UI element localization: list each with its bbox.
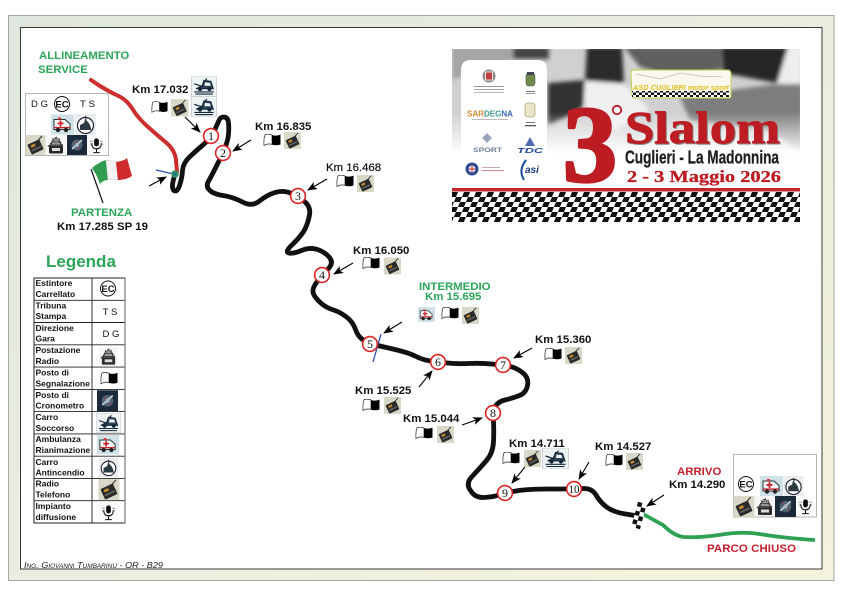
arrow	[233, 140, 251, 151]
marker 4: 4	[319, 268, 325, 282]
row: direzione gara	[36, 323, 119, 344]
italian flag	[91, 158, 132, 203]
route: stage (black)	[172, 117, 638, 516]
marker 5	[363, 337, 377, 351]
marker 9: 9	[502, 486, 508, 500]
row: posto di segnalazione: Posto di	[36, 368, 69, 378]
icon: radio	[565, 347, 582, 364]
label: arrivo	[669, 466, 725, 491]
start line	[156, 170, 178, 177]
callout: Km 14.711	[503, 438, 568, 483]
row: radio telefono: Radio	[36, 478, 59, 488]
marker 7	[496, 358, 510, 372]
row: carro soccorso: Carro	[36, 412, 58, 422]
marker 5: 5	[367, 337, 373, 351]
icon: microphone	[796, 496, 815, 516]
row: tribuna stampa: Tribuna	[36, 300, 66, 310]
icon: radio post	[46, 135, 66, 155]
callout: Km 15.525	[355, 371, 432, 414]
marker 8	[486, 406, 500, 420]
callout: Km 16.468	[308, 162, 381, 192]
callout: Km 16.050	[334, 245, 409, 274]
crest: Provincia di Oristano	[525, 103, 536, 126]
row: carro soccorso	[36, 412, 121, 433]
row: postazione radio: Postazione	[36, 345, 81, 355]
row: estintore	[36, 278, 116, 299]
marker 6	[431, 355, 445, 369]
arrow	[512, 467, 525, 483]
row: radio telefono: Telefono	[36, 490, 70, 500]
icon: timing post	[67, 135, 87, 155]
icon: EC: EC	[739, 480, 753, 490]
arrow	[308, 179, 327, 190]
icon: radio	[524, 450, 541, 467]
logo: ACI Sport: SPORT	[473, 148, 502, 154]
icon: flag	[152, 102, 168, 112]
row: postazione radio	[36, 345, 118, 366]
arrow	[419, 371, 432, 387]
callout: Km 14.527	[579, 441, 651, 479]
icon: ambulance	[760, 476, 783, 496]
row: postazione radio: Radio	[36, 356, 59, 366]
row: ambulanza: Ambulanza	[36, 434, 81, 444]
label: partenza: PARTENZA	[71, 207, 132, 219]
title: 3° Slalom: Slalom	[625, 102, 780, 153]
icon: EC: EC	[55, 100, 69, 110]
start services box: T S	[80, 99, 95, 110]
icon: flag	[606, 454, 622, 466]
marker 4	[315, 268, 329, 282]
logo: TDC	[517, 137, 544, 155]
icon: radio	[384, 258, 401, 274]
row: tribuna stampa: Stampa	[36, 311, 66, 321]
icon: flag	[416, 427, 432, 438]
row: direzione gara: Gara	[36, 334, 55, 344]
logo: ACI Sport Sardegna	[466, 162, 504, 176]
icon: flag	[337, 175, 354, 186]
callout: Km 16.835	[233, 121, 312, 151]
row: estintore: EC	[101, 284, 115, 295]
icon: radio	[357, 175, 374, 192]
start services box: D G	[31, 99, 48, 110]
row: tribuna stampa: T S	[103, 307, 117, 318]
label: partenza	[57, 207, 148, 233]
arrow	[514, 348, 532, 358]
marker 1: 1	[208, 129, 214, 143]
marker 2: 2	[220, 146, 226, 160]
callout: intermedio	[384, 281, 491, 333]
icon: radio post	[755, 496, 775, 516]
label: arrivo: Km 14.290	[669, 479, 725, 491]
marker 3	[291, 189, 305, 203]
logo: ASI	[521, 160, 539, 180]
organiser badge: ASD CUGLIERI motor sport	[632, 85, 730, 92]
row: estintore: Carrellato	[36, 289, 75, 299]
row: posto di cronometro: Posto di	[36, 390, 69, 400]
label: partenza: Km 17.285 SP 19	[57, 221, 148, 233]
sponsors panel	[461, 60, 547, 188]
marker 7: 7	[500, 358, 506, 372]
icon: radio	[384, 397, 401, 414]
crest: Comune di Cuglieri	[526, 72, 535, 94]
arrow	[462, 418, 482, 425]
callout: Km 16.468: Km 16.468	[326, 162, 381, 174]
label: allineamento service	[38, 50, 129, 76]
icon: flag	[503, 452, 520, 464]
start services box	[26, 94, 108, 156]
arrow	[384, 322, 402, 333]
row: direzione gara: D G	[103, 329, 119, 340]
logo: ASI: asi	[525, 165, 539, 176]
arrow	[185, 117, 200, 132]
label: parco chiuso: PARCO CHIUSO	[707, 543, 796, 555]
icon: ambulance	[418, 307, 435, 322]
row: posto di cronometro: Cronometro	[36, 400, 84, 410]
marker 1	[204, 129, 218, 143]
row: radio telefono	[36, 478, 120, 500]
markers	[204, 129, 581, 500]
callout: Km 16.835: Km 16.835	[255, 121, 312, 133]
route: alignment service (red)	[91, 80, 177, 172]
callout: Km 17.032	[132, 76, 217, 132]
arrow	[334, 263, 353, 274]
row: ambulanza	[36, 434, 119, 455]
icon: flag	[363, 257, 380, 268]
icon: microphone	[87, 136, 106, 154]
icon: flag	[442, 307, 458, 318]
callout: intermedio: INTERMEDIO	[419, 281, 491, 293]
row: direzione gara: Direzione	[36, 323, 74, 333]
title: 3° Slalom	[563, 86, 780, 205]
row: posto di cronometro	[36, 390, 118, 411]
icon: radio	[734, 496, 754, 517]
icon: fire truck	[784, 476, 804, 496]
row: estintore: Estintore	[36, 278, 73, 288]
marker 10: 10	[568, 482, 580, 496]
label: allineamento service: SERVICE	[38, 64, 88, 76]
icon: radio	[462, 307, 479, 324]
crest: Regione Sardegna	[474, 70, 504, 93]
label: allineamento service: ALLINEAMENTO	[39, 50, 129, 62]
row: tribuna stampa	[36, 300, 117, 321]
banner red bar	[452, 188, 800, 192]
marker 6: 6	[435, 355, 441, 369]
marker 2	[216, 146, 230, 160]
label: arrivo: ARRIVO	[677, 466, 721, 478]
callout: Km 15.044	[403, 413, 482, 443]
logo: ACI Sport	[473, 133, 502, 154]
icon: flag	[363, 399, 380, 410]
event banner	[452, 47, 802, 222]
callout: Km 14.527: Km 14.527	[595, 441, 651, 453]
row: impianto diffusione: Impianto	[36, 501, 71, 511]
icon: fire truck	[75, 114, 96, 135]
finish services box	[734, 454, 816, 517]
subtitle: Cuglieri - La Madonnina	[625, 148, 780, 168]
arrow to start	[149, 177, 166, 186]
marker 3: 3	[295, 189, 301, 203]
callout: intermedio: Km 15.695	[425, 291, 482, 303]
legend title: Legenda	[46, 252, 116, 271]
marker 8: 8	[490, 406, 496, 420]
banner checker strip	[452, 192, 800, 222]
author credit: Ing. Giovanni Tumbarinu - OR - B29	[24, 560, 163, 570]
logo: Sardegna: SARDEGNA	[467, 110, 513, 118]
icon: tow truck	[191, 96, 217, 117]
intermediate line	[373, 334, 381, 362]
row: impianto diffusione: diffusione	[36, 512, 76, 522]
title: 3° Slalom: 3	[563, 86, 617, 205]
marker 9	[498, 486, 512, 500]
banner photo background	[452, 47, 802, 154]
callout: Km 15.044: Km 15.044	[403, 413, 460, 425]
callout: Km 15.360	[514, 334, 591, 364]
organiser badge	[631, 70, 731, 98]
route: parco chiuso (green)	[643, 514, 815, 540]
icon: radio	[171, 99, 188, 116]
row: carro antincendio	[36, 457, 118, 478]
legend table	[34, 278, 125, 523]
icon: radio	[284, 132, 301, 149]
icon: radio	[437, 426, 454, 443]
row: carro antincendio: Antincendio	[36, 468, 85, 478]
row: carro antincendio: Carro	[36, 457, 58, 467]
callout: Km 16.050: Km 16.050	[353, 245, 409, 257]
icon: flag	[545, 348, 562, 360]
icon: ambulance	[51, 114, 74, 134]
arrow to finish	[647, 495, 664, 506]
row: posto di segnalazione: Segnalazione	[36, 378, 90, 388]
row: ambulanza: Rianimazione	[36, 445, 91, 455]
icon: flag	[264, 134, 280, 146]
icon: radio	[26, 135, 46, 155]
finish checkered line	[631, 502, 647, 529]
icon: tow truck	[542, 448, 568, 469]
arrow	[579, 462, 589, 479]
icon: tow truck	[191, 76, 217, 96]
callout: Km 15.360: Km 15.360	[535, 334, 591, 346]
logo: TDC: TDC	[517, 146, 544, 155]
date: 2 - 3 Maggio 2026	[627, 167, 781, 186]
row: carro soccorso: Soccorso	[36, 423, 74, 433]
callout: Km 15.525: Km 15.525	[355, 385, 412, 397]
row: posto di segnalazione	[36, 368, 118, 388]
icon: radio	[626, 453, 643, 470]
row: impianto diffusione	[36, 501, 118, 522]
callout: Km 14.711: Km 14.711	[509, 438, 565, 450]
icon: timing post	[775, 496, 796, 517]
callout: Km 17.032: Km 17.032	[132, 84, 188, 96]
